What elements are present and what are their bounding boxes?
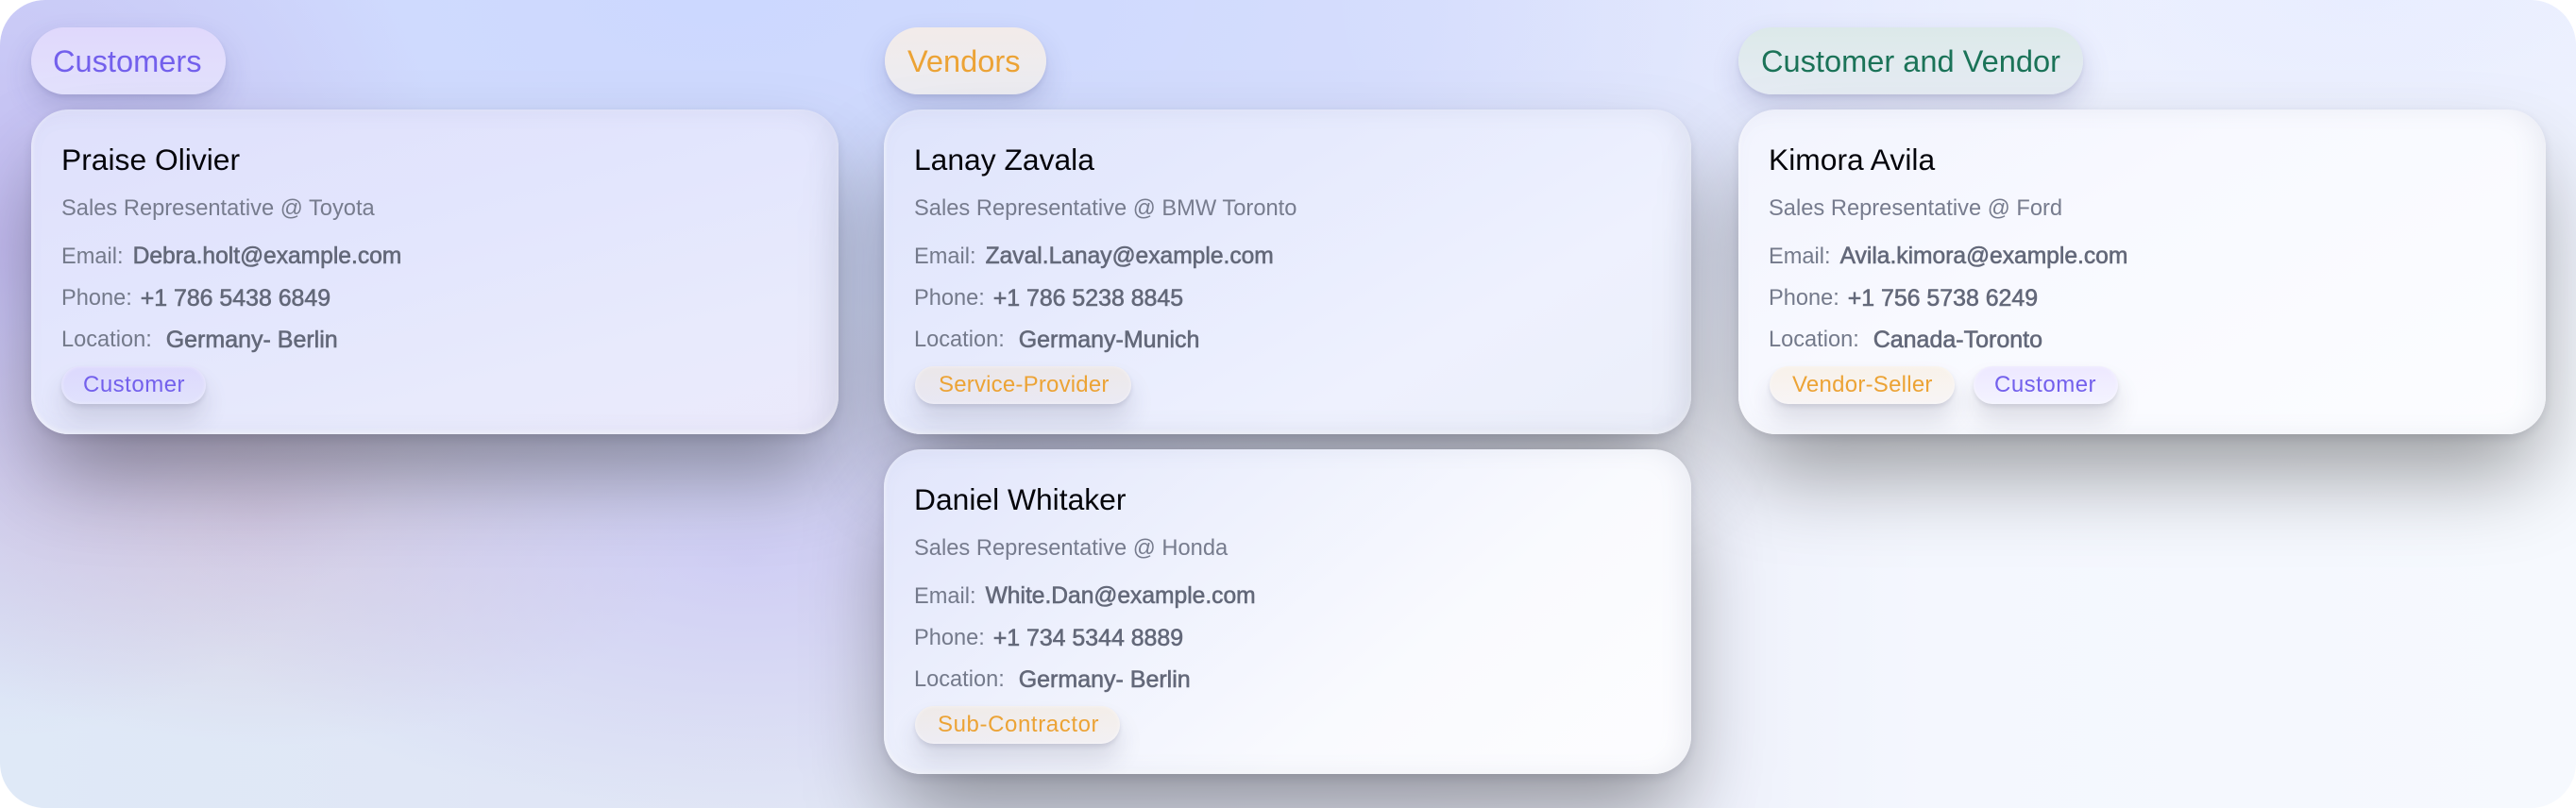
- location row: Location:: [914, 328, 1005, 352]
- email row: Avila.kimora@example.com: [1840, 244, 2127, 269]
- job title: Sales Representative @ Ford: [1769, 196, 2062, 221]
- email row: Debra.holt@example.com: [133, 244, 401, 269]
- location row: [914, 327, 1199, 353]
- email row: Zaval.Lanay@example.com: [986, 244, 1274, 269]
- phone row: +1 786 5238 8845: [993, 285, 1183, 311]
- contact name: Lanay Zavala: [914, 143, 1094, 177]
- job title: Sales Representative @ Honda: [914, 536, 1228, 561]
- contact name: Daniel Whitaker: [914, 482, 1126, 516]
- heading: Vendors: [885, 27, 1046, 94]
- tag: Customer: [1974, 366, 2118, 404]
- phone row: Phone:: [61, 286, 132, 311]
- location row: Location:: [914, 667, 1005, 692]
- phone row: +1 786 5438 6849: [141, 285, 330, 311]
- heading: Customers: Customers: [53, 43, 202, 78]
- tag: Vendor-Seller: Vendor-Seller: [1792, 372, 1933, 397]
- tag: Service-Provider: Service-Provider: [939, 372, 1110, 397]
- job title: Sales Representative @ Toyota: [61, 196, 375, 221]
- heading: Vendors: Vendors: [907, 43, 1021, 78]
- heading: Customer and Vendor: [1738, 27, 2083, 94]
- email row: White.Dan@example.com: [986, 583, 1256, 609]
- card: Lanay Zavala: [884, 109, 1691, 434]
- heading: Customers: [31, 27, 226, 94]
- job title: Sales Representative @ BMW Toronto: [914, 196, 1296, 221]
- contact name: Praise Olivier: [61, 143, 240, 177]
- location row: [61, 327, 338, 353]
- email row: Email:: [914, 244, 976, 269]
- location row: Location:: [61, 328, 152, 352]
- tag: Service-Provider: [915, 366, 1131, 404]
- location row: [914, 666, 1191, 693]
- tag: Customer: Customer: [1994, 372, 2096, 397]
- phone row: +1 734 5344 8889: [993, 625, 1183, 651]
- location row: Germany- Berlin: [166, 327, 338, 353]
- tag: Customer: Customer: [83, 372, 185, 397]
- card: Praise Olivier: [31, 109, 839, 434]
- phone row: Phone:: [914, 626, 985, 650]
- tag: Vendor-Seller: [1770, 366, 1955, 404]
- phone row: +1 756 5738 6249: [1848, 285, 2038, 311]
- phone row: Phone:: [1769, 286, 1839, 311]
- location row: Germany-Munich: [1019, 327, 1199, 353]
- tag: Sub-Contractor: [915, 706, 1120, 744]
- email row: Email:: [61, 244, 124, 269]
- heading: Customer and Vendor: Customer and Vendor: [1761, 43, 2060, 78]
- tag: Sub-Contractor: Sub-Contractor: [938, 712, 1099, 737]
- email row: Email:: [1769, 244, 1831, 269]
- location row: [1769, 327, 2042, 353]
- contact name: Kimora Avila: [1769, 143, 1935, 177]
- card: Daniel Whitaker: [884, 449, 1691, 774]
- tag: Customer: [61, 366, 206, 404]
- phone row: Phone:: [914, 286, 985, 311]
- card: Kimora Avila: [1738, 109, 2546, 434]
- location row: Germany- Berlin: [1019, 666, 1191, 693]
- location row: Canada-Toronto: [1873, 327, 2042, 353]
- location row: Location:: [1769, 328, 1859, 352]
- email row: Email:: [914, 584, 976, 609]
